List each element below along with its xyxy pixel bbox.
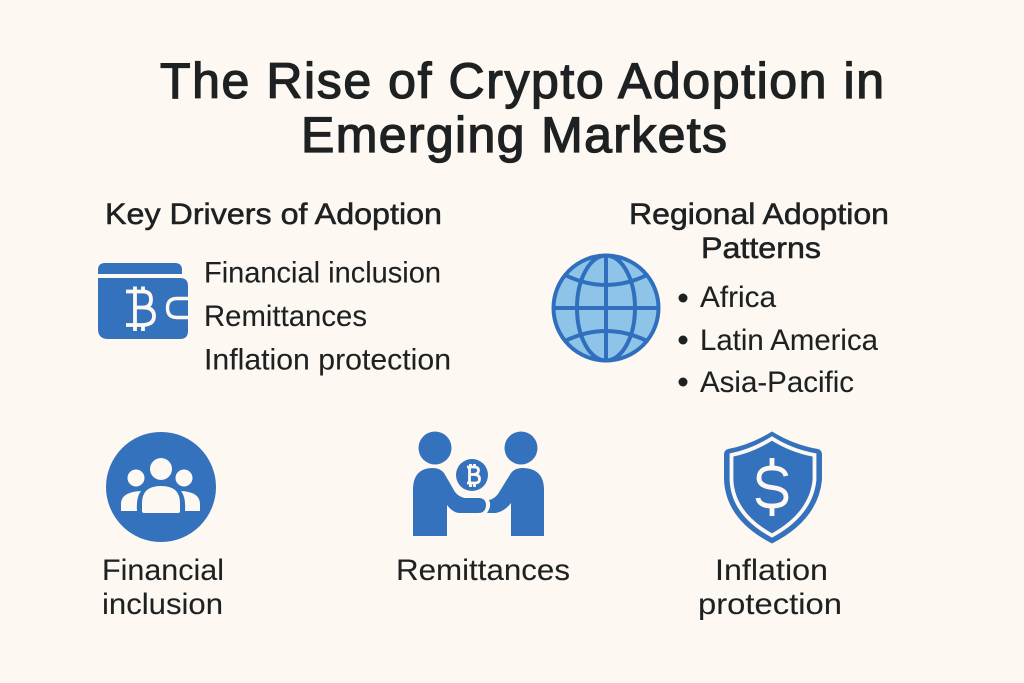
list: drivers <box>204 256 451 376</box>
heading: regional patterns: Regional Adoption <box>629 198 889 231</box>
icon: handshake with bitcoin <box>413 432 544 536</box>
heading: regional patterns: Patterns <box>701 232 821 265</box>
label: financial inclusion: inclusion <box>102 588 223 621</box>
panel: inflation protection <box>698 432 842 621</box>
label: inflation protection <box>698 554 842 621</box>
label: financial inclusion: Financial <box>102 554 224 587</box>
heading: key drivers: Key Drivers of Adoption <box>105 198 442 231</box>
icon: bitcoin wallet <box>98 263 188 339</box>
title: The Rise of Crypto Adoption in <box>160 53 884 109</box>
panel: financial inclusion <box>102 432 224 621</box>
panel: key drivers of adoption <box>98 198 451 376</box>
icon: globe <box>554 256 658 360</box>
label: financial inclusion <box>102 554 224 621</box>
label: inflation protection: protection <box>698 588 842 621</box>
panel: remittances <box>396 432 570 587</box>
icon: people in circle <box>106 432 216 542</box>
heading: regional patterns <box>629 198 889 265</box>
list: drivers: Financial inclusion <box>204 256 441 290</box>
label: remittances: Remittances <box>396 554 570 587</box>
list: drivers: Inflation protection <box>204 344 451 376</box>
panel: regional adoption patterns <box>554 198 889 399</box>
list: regions: Asia-Pacific <box>700 366 854 399</box>
list: regions <box>678 281 878 399</box>
list: regions: Latin America <box>700 324 878 357</box>
list: drivers: Remittances <box>204 300 367 333</box>
title <box>160 53 884 163</box>
icon: shield with dollar <box>724 432 822 544</box>
title: Emerging Markets <box>301 107 727 163</box>
list: regions: Africa <box>700 281 776 314</box>
label: inflation protection: Inflation <box>715 554 828 587</box>
